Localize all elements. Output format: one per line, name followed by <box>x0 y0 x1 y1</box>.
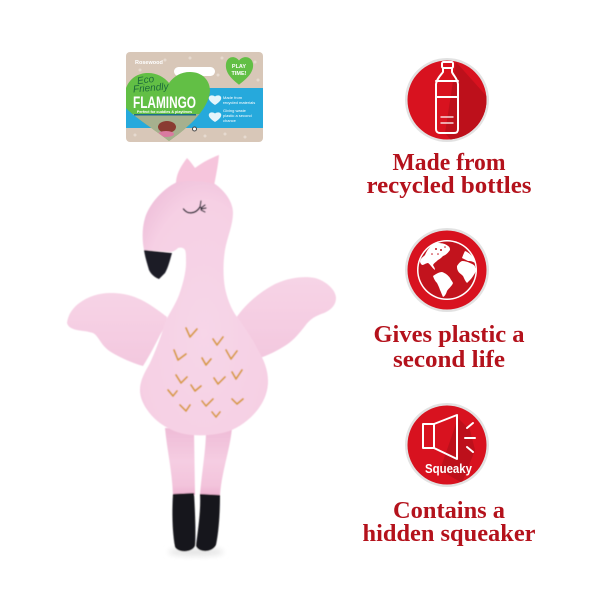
card benefit one: recycled materials <box>223 100 255 105</box>
heading: recycled bottles <box>366 150 532 199</box>
heading: hidden squeaker: Contains a <box>393 498 505 524</box>
play time badge <box>226 57 253 85</box>
heading: hidden squeaker <box>362 498 536 547</box>
card benefit two <box>209 108 252 123</box>
hang hole <box>174 67 215 76</box>
heading: second life: Gives plastic a <box>374 322 524 348</box>
heading: second life <box>374 322 524 373</box>
icon: globe <box>405 228 489 312</box>
card benefit one: Made from <box>223 95 243 100</box>
body and neck <box>140 181 268 435</box>
flamingo title: FLAMINGO <box>133 93 196 112</box>
heart subtitle: Perfect for cuddles & playtimes <box>137 110 192 114</box>
right leg <box>200 428 232 495</box>
beak <box>144 250 172 279</box>
play time badge: PLAY <box>232 64 246 70</box>
floor shadow <box>168 548 224 556</box>
heart script text: Eco <box>136 74 155 87</box>
icon: squeaky speaker: Squeaky <box>425 461 473 476</box>
card eyelet <box>192 127 196 131</box>
product card <box>126 52 263 144</box>
left boot <box>172 493 195 551</box>
icon: plastic bottle <box>405 58 490 145</box>
right boot <box>196 494 220 551</box>
left leg <box>165 428 195 495</box>
continents <box>420 243 476 297</box>
crown <box>176 155 219 186</box>
card benefit two: chance <box>223 118 237 123</box>
card benefit two: Giving waste <box>223 108 247 113</box>
icon: squeaky speaker <box>405 403 489 487</box>
card benefit two: plastic a second <box>223 113 252 118</box>
heading: recycled bottles: recycled bottles <box>366 173 532 199</box>
product card: Friendly <box>133 81 170 96</box>
heading: hidden squeaker: hidden squeaker <box>362 521 536 547</box>
play time badge: TIME! <box>232 71 247 77</box>
heading: recycled bottles: Made from <box>392 150 506 176</box>
photo in heart <box>132 114 200 141</box>
right wing <box>236 277 336 358</box>
card background <box>126 52 263 142</box>
orange chevrons <box>168 328 243 417</box>
brand name: Rosewood <box>135 60 163 66</box>
green heart <box>126 72 210 141</box>
left wing <box>67 293 167 366</box>
card benefit one <box>209 95 255 105</box>
heading: second life: second life <box>393 347 505 373</box>
flamingo plush toy <box>67 155 336 556</box>
closed eye <box>184 201 206 213</box>
